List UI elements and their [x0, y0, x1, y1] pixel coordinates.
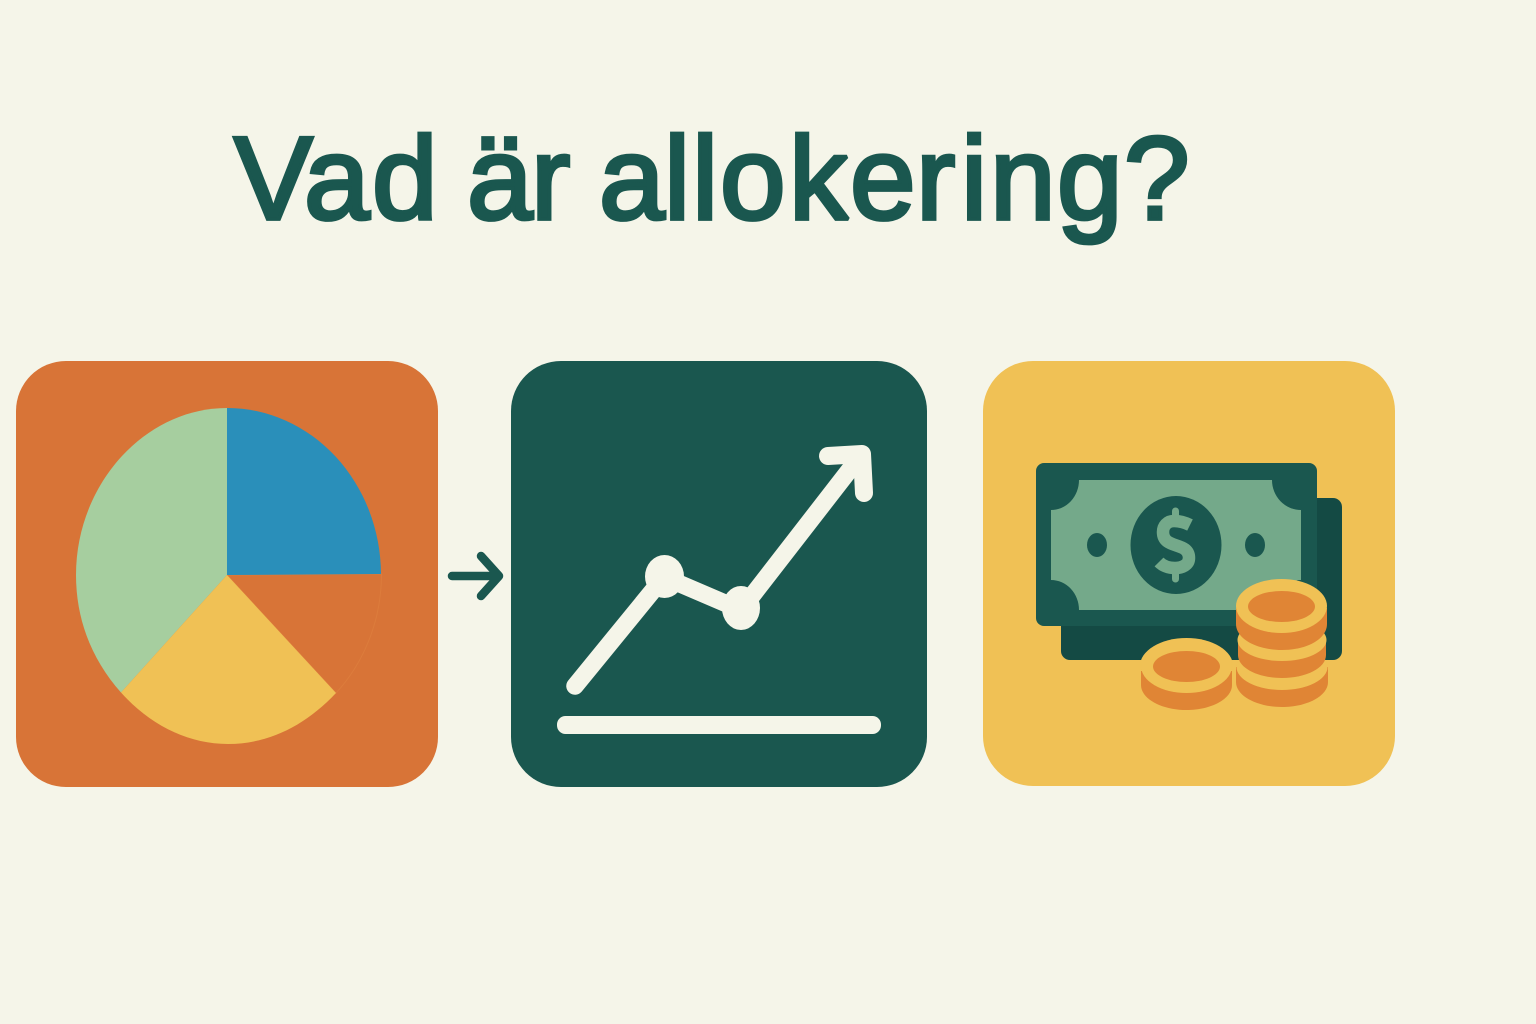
pie slice: green [76, 408, 227, 692]
dollar medallion [1130, 496, 1222, 594]
panel: growth chart [511, 361, 927, 787]
single coin [1140, 638, 1233, 710]
panel: pie chart [16, 361, 438, 787]
data point 1 [645, 555, 684, 598]
coin stack [1236, 579, 1328, 707]
bottom coin [1236, 667, 1328, 707]
pie slice: yellow [121, 575, 336, 744]
arrow between pie and chart [452, 556, 499, 596]
left dot [1087, 533, 1107, 557]
pie slice: orange [227, 574, 382, 693]
pie slice: blue [227, 408, 381, 575]
top coin [1236, 608, 1327, 650]
title: Vad är allokering? [234, 113, 1190, 245]
arrowhead [828, 454, 864, 493]
data point 2 [722, 586, 760, 630]
banknote face [1051, 480, 1301, 610]
chart baseline [557, 716, 881, 734]
back banknote [1061, 498, 1342, 660]
front banknote [1036, 463, 1317, 626]
panel: money [983, 361, 1395, 786]
rising line [575, 459, 858, 686]
middle coin [1238, 641, 1326, 678]
right dot [1245, 533, 1265, 557]
